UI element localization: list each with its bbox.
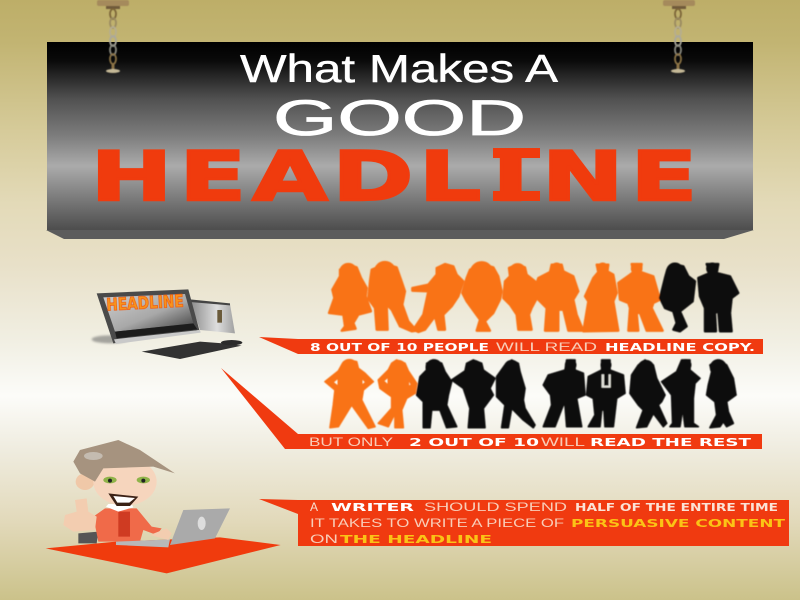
callout: writer advice banner: A [310, 500, 318, 514]
callout: writer advice banner: ON [310, 532, 338, 546]
headline text on screen: HEADLINE [106, 291, 184, 315]
title: HEADLINE: HEADLINE [91, 137, 697, 216]
tower [190, 300, 235, 333]
callout: but only 2 out of 10 banner: 2 OUT OF 10 [409, 436, 540, 449]
chart: row of 10 people, 2 orange [325, 360, 736, 428]
callout: but only 2 out of 10 banner: READ THE REST [590, 436, 752, 449]
icon: desktop computer [92, 289, 242, 359]
chart: row of 10 people, 8 orange [329, 262, 738, 332]
title: What Makes A: What Makes A [240, 48, 558, 91]
hair [73, 440, 175, 482]
icon: left hanging chain [97, 0, 129, 73]
callout: 8 out of 10 banner: WILL READ [496, 340, 598, 354]
callout: 8 out of 10 banner: HEADLINE COPY. [605, 341, 755, 354]
laptop [116, 539, 170, 547]
desk [46, 537, 281, 573]
panel: hanging title sign [46, 42, 754, 239]
callout: writer advice banner: IT TAKES TO WRITE A PIECE OF [310, 516, 564, 530]
ear [76, 473, 94, 490]
callout: writer advice banner: HALF OF THE ENTIRE TIME [575, 501, 778, 514]
people 3 to 5, black [417, 360, 535, 428]
mouth [108, 493, 138, 506]
eyes [103, 477, 117, 483]
callout: writer advice banner: PERSUASIVE CONTENT [571, 517, 786, 530]
callout: but only 2 out of 10 banner: BUT ONLY [309, 435, 393, 449]
title: GOOD: GOOD [273, 90, 526, 146]
people 1 and 2, orange [325, 360, 417, 428]
callout: 8 out of 10 banner: 8 OUT OF 10 PEOPLE [310, 341, 489, 354]
people 6 to 8, orange [532, 264, 663, 331]
keyboard [142, 342, 242, 359]
callout: but only 2 out of 10 banner: WILL [541, 435, 586, 449]
callout: writer advice banner: WRITER [331, 501, 415, 514]
callout: writer advice banner: THE HEADLINE [340, 533, 492, 546]
people 6 to 10, black [543, 360, 736, 428]
icon: right hanging chain [663, 0, 695, 73]
monitor [97, 289, 199, 343]
people 9 and 10, black [660, 264, 738, 331]
callout: writer advice banner [259, 499, 789, 546]
shirt [93, 508, 162, 542]
sleeve [78, 532, 98, 543]
callout: 8 out of 10 banner [259, 337, 763, 354]
people 1 to 5, orange [329, 262, 537, 332]
fist with thumb [63, 498, 97, 532]
callout: writer advice banner: SHOULD SPEND [424, 500, 568, 514]
icon: writer at laptop on red desk [46, 440, 281, 573]
callout: but only 2 out of 10 banner [221, 368, 762, 449]
face [93, 458, 157, 506]
